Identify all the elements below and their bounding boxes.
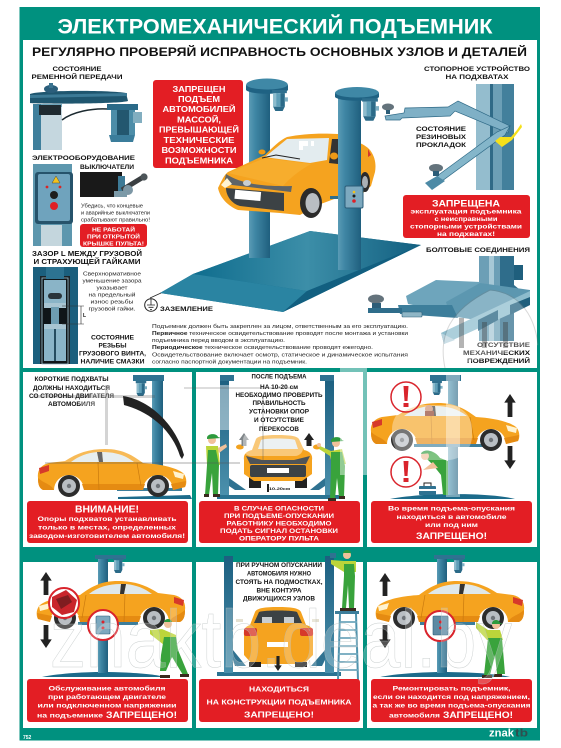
text: short arms — [29, 376, 114, 408]
text: after lifting: НА 10-20 см — [260, 384, 298, 391]
lift — [390, 375, 515, 499]
note: check switches — [81, 204, 150, 224]
warning: faulty locks: эксплуатация подъемника — [410, 208, 522, 216]
car — [218, 134, 375, 218]
warning box: Ремонтировать подъемник, — [392, 686, 511, 692]
warning: overweight lift: ТЕХНИЧЕСКИЕ — [164, 136, 235, 145]
warning box: НА КОНСТРУКЦИИ ПОДЪЕМНИКА — [206, 698, 352, 706]
warning: overweight lift: ПРЕВЫШАЮЩЕЙ — [159, 124, 239, 134]
illustration: main lift with car — [160, 78, 421, 312]
text: short arms: ДОЛЖНЫ НАХОДИТЬСЯ — [33, 385, 110, 392]
car — [376, 581, 524, 629]
label: screw thread: РЕЗЬБЫ — [98, 342, 126, 350]
lift post — [117, 375, 192, 499]
panel: check after lifting — [196, 372, 363, 547]
label: screw thread: НАЛИЧИЕ СМАЗКИ — [80, 358, 145, 366]
warning: overweight lift: АВТОМОБИЛЕЙ — [162, 103, 236, 114]
worker left — [204, 434, 227, 497]
text: after lifting: ПЕРЕКОСОВ — [259, 426, 299, 433]
panel: no repairs while powered — [367, 555, 537, 728]
warning: overweight lift: ВОЗМОЖНОСТИ — [162, 146, 237, 155]
illustration: limit switch — [80, 172, 148, 197]
warning: overweight lift: ЗАПРЕЩЕН — [172, 85, 226, 94]
icon: engine — [49, 588, 79, 618]
arrow: down — [379, 625, 391, 648]
text: after lifting: И ОТСУТСТВИЕ — [254, 417, 304, 424]
car front view — [236, 435, 321, 492]
arrow: up — [40, 572, 52, 595]
worker repairing — [476, 620, 505, 678]
logo: tb — [515, 728, 528, 740]
warning: open cover — [80, 224, 147, 248]
label: mechanical damage: ПОВРЕЖДЕНИЙ — [467, 356, 530, 365]
panel: inspection overview — [23, 40, 538, 368]
icon: control panel — [88, 610, 118, 640]
label: switches: ВЫКЛЮЧАТЕЛИ — [80, 165, 134, 171]
worker on ladder — [330, 550, 356, 611]
note: gap reduction: на предельный — [88, 292, 136, 298]
warning: overweight lift — [153, 80, 243, 168]
label: rubber pads: РЕЗИНОВЫХ — [416, 134, 467, 141]
warning: overweight lift: ПОДЪЕМНИКА — [165, 156, 233, 166]
label: rubber pads: ПРОКЛАДОК — [416, 142, 466, 149]
illustration: control box — [33, 164, 73, 246]
warning: overweight lift: ПОДЪЕМ — [178, 95, 220, 104]
note: gap reduction: указывает — [96, 286, 128, 292]
warning: faulty locks — [403, 195, 530, 238]
arrow: up — [379, 573, 391, 596]
text: manual lowering — [236, 562, 323, 602]
lift base — [160, 231, 421, 312]
arrow: curved to engine — [123, 396, 184, 459]
arrow: up — [504, 394, 516, 417]
warning box — [27, 501, 188, 543]
car — [37, 581, 185, 629]
warning box: заводом-изготовителем автомобиля! — [29, 532, 185, 540]
warning: faulty locks: ЗАПРЕЩЕНА — [432, 198, 500, 210]
label: locking device: НА ПОДХВАТАХ — [446, 74, 509, 81]
lift — [380, 555, 510, 677]
text block: inspection rules — [152, 324, 409, 366]
warning box: В СЛУЧАЕ ОПАСНОСТИ — [234, 506, 324, 512]
warning box — [371, 679, 532, 722]
illustration: belt drive — [30, 83, 142, 150]
warning: open cover: ПРИ ОТКРЫТОЙ — [87, 232, 140, 240]
warning box: ПРИ ПОДЪЕМЕ-ОПУСКАНИИ — [224, 513, 334, 520]
warning box: а так же во время подъема-опускания — [372, 702, 531, 710]
icon: grounding — [145, 293, 214, 313]
icon: danger in car — [391, 382, 421, 412]
icon: control panel — [425, 611, 455, 641]
note: check switches: срабатывают правильно! — [81, 218, 150, 224]
text: after lifting: НЕОБХОДИМО ПРОВЕРИТЬ — [236, 392, 323, 399]
warning box: Опоры подхватов устанавливать — [38, 516, 176, 523]
logo — [489, 728, 528, 740]
label: nut gap: И СТРАХУЮЩЕЙ ГАЙКАМИ — [34, 257, 140, 266]
label: mechanical damage: МЕХАНИЧЕСКИХ — [463, 350, 531, 357]
subtitle: РЕГУЛЯРНО ПРОВЕРЯЙ ИСПРАВНОСТЬ ОСНОВНЫХ УЗЛОВ И ДЕТАЛЕЙ — [32, 44, 527, 59]
text block: inspection rules: Первичное техническое освидетельствование проводят после монтажа и установки — [152, 331, 408, 337]
note: gap reduction: грузовой гайки. — [88, 306, 136, 312]
warning box — [199, 679, 360, 722]
warning box: Обслуживание автомобиля — [48, 684, 166, 692]
car — [38, 449, 186, 497]
icon: danger under car — [391, 457, 421, 487]
warning: faulty locks: с неисправными — [434, 216, 498, 223]
text: manual lowering: СТОЯТЬ НА ПОДМОСТКАХ, — [236, 579, 323, 586]
warning box: РАБОТНИКУ НЕОБХОДИМО — [226, 520, 332, 528]
warning box — [199, 501, 360, 543]
panel: no presence during lift — [367, 372, 537, 547]
label: bolted joints: БОЛТОВЫЕ СОЕДИНЕНИЯ — [426, 247, 530, 254]
label: locking device: СТОПОРНОЕ УСТРОЙСТВО — [424, 64, 530, 73]
label: belt drive: РЕМЕННОЙ ПЕРЕДАЧИ — [32, 72, 123, 81]
car rear view — [236, 607, 319, 667]
lift — [217, 375, 341, 499]
warning: faulty locks: на подхватах! — [437, 231, 495, 238]
note: gap reduction: уменьшение зазора — [82, 278, 143, 284]
left post — [246, 78, 288, 258]
illustration: lead screw: L — [83, 313, 86, 319]
illustration: lead screw — [33, 267, 86, 364]
text block: inspection rules: согласно паспортной документации на подъемник. — [152, 358, 308, 366]
warning box: или под ним — [425, 522, 478, 529]
label: nut gap: ЗАЗОР L МЕЖДУ ГРУЗОВОЙ — [32, 249, 142, 258]
arrow: down — [40, 625, 52, 648]
warning: overweight lift: МАССОЙ, — [177, 114, 221, 124]
watermark shapes: upper row — [31, 360, 472, 497]
title: ЭЛЕКТРОМЕХАНИЧЕСКИЙ ПОДЪЕМНИК — [58, 14, 493, 38]
car front view: 10-20см — [269, 487, 290, 491]
label: locking device — [424, 64, 530, 81]
label: nut gap — [32, 249, 142, 266]
text: manual lowering: ВНЕ КОНТУРА — [256, 588, 302, 594]
arrow: down — [274, 656, 282, 671]
note: gap reduction: износ резьбы — [90, 300, 134, 306]
label: mechanical damage — [463, 342, 531, 365]
text: after lifting — [236, 374, 323, 433]
icon: grounding: ЗАЗЕМЛЕНИЕ — [160, 306, 214, 313]
text block: inspection rules: подъемника перед вводом в эксплуатацию. — [152, 338, 286, 344]
warning box: ЗАПРЕЩЕНО! — [244, 710, 314, 720]
warning box — [371, 501, 532, 543]
label: rubber pads — [416, 126, 467, 149]
warning box: ЗАПРЕЩЕНО! — [443, 710, 513, 720]
label: screw thread: СОСТОЯНИЕ — [91, 334, 135, 342]
logo: znak — [489, 728, 515, 740]
label: belt drive — [32, 66, 123, 81]
text: short arms: КОРОТКИЕ ПОДХВАТЫ — [34, 376, 108, 383]
poster code: 752 — [23, 735, 32, 741]
warning box — [27, 679, 188, 722]
text block: inspection rules: Периодическое техническое освидетельствование проводят ежегодно. — [152, 345, 374, 351]
illustration: bolted joints — [368, 256, 530, 344]
text: short arms: АВТОМОБИЛЯ — [48, 401, 95, 408]
lift — [42, 555, 165, 677]
warning box: только в местах, определенных — [38, 524, 176, 532]
warning box: находиться в автомобиле — [396, 513, 507, 521]
worker under car — [419, 450, 448, 495]
warning box: при работающем двигателе — [48, 693, 166, 701]
label: screw thread: ГРУЗОВОГО ВИНТА, — [79, 350, 146, 358]
lift — [217, 556, 341, 676]
label: electrical equipment: ЭЛЕКТРООБОРУДОВАНИЕ — [32, 155, 136, 162]
text: short arms: СО СТОРОНЫ ДВИГАТЕЛЯ — [29, 393, 114, 400]
panel: no service with engine running — [23, 555, 192, 728]
warning box: ЗАПРЕЩЕНО! — [416, 531, 487, 541]
right post — [335, 87, 379, 270]
text: manual lowering: ДВИЖУЩИХСЯ УЗЛОВ — [243, 596, 316, 602]
note: check switches: и аварийные выключатели — [81, 210, 150, 216]
ladder — [335, 611, 359, 680]
warning: faulty locks: стопорными устройствами — [410, 222, 522, 230]
warning box: НАХОДИТЬСЯ — [249, 684, 309, 694]
text block: inspection rules: Освидетельствование включает осмотр, статическое и динамическое испытания — [152, 352, 408, 358]
warning box: Во время подъема-опускания — [388, 506, 515, 512]
note: check switches: Убедись, что концевые — [81, 204, 143, 210]
label: rubber pads: СОСТОЯНИЕ — [416, 126, 466, 133]
text: after lifting: УСТАНОВКИ ОПОР — [249, 408, 309, 416]
panel: no standing on lift structure — [196, 550, 363, 728]
label: screw thread — [79, 334, 146, 366]
worker pushing — [150, 619, 189, 678]
arrow: down — [504, 446, 516, 469]
warning box: ПОДАТЬ СИГНАЛ ОСТАНОВКИ — [220, 528, 338, 535]
warning box: или подключенном напряжении — [38, 702, 176, 710]
car with driver — [371, 403, 519, 451]
label: mechanical damage: ОТСУТСТВИЕ — [477, 342, 531, 349]
text block: inspection rules: Подъемник должен быть закреплен за лицом, ответственным за его эксплуатацию. — [152, 324, 409, 330]
warning: open cover: КРЫШКЕ ПУЛЬТА! — [83, 242, 144, 248]
text: manual lowering: ПРИ РУЧНОМ ОПУСКАНИИ — [236, 562, 323, 569]
warning box: если он находится под напряжением, — [373, 694, 530, 701]
text: after lifting: ПРАВИЛЬНОСТЬ — [252, 400, 306, 407]
worker right — [317, 437, 346, 501]
arrows up — [239, 433, 314, 446]
warning: open cover: НЕ РАБОТАЙ — [92, 226, 135, 234]
note: gap reduction: Сверхнормативное — [83, 272, 141, 278]
text: manual lowering: АВТОМОБИЛЯ НУЖНО — [247, 570, 311, 578]
label: belt drive: СОСТОЯНИЕ — [52, 66, 102, 73]
warning box: ВНИМАНИЕ! — [75, 504, 139, 516]
watermark seal — [443, 290, 538, 368]
note: gap reduction — [82, 272, 143, 312]
text: after lifting: ПОСЛЕ ПОДЪЕМА — [252, 374, 307, 380]
illustration: locking arms — [382, 84, 522, 190]
warning box: автомобиля — [389, 712, 440, 720]
warning box: на подъемнике — [37, 712, 103, 720]
warning box: ЗАПРЕЩЕНО! — [106, 710, 177, 720]
warning box: ОПЕРАТОРУ ПУЛЬТА — [239, 536, 319, 542]
panel: short arms — [23, 372, 192, 547]
